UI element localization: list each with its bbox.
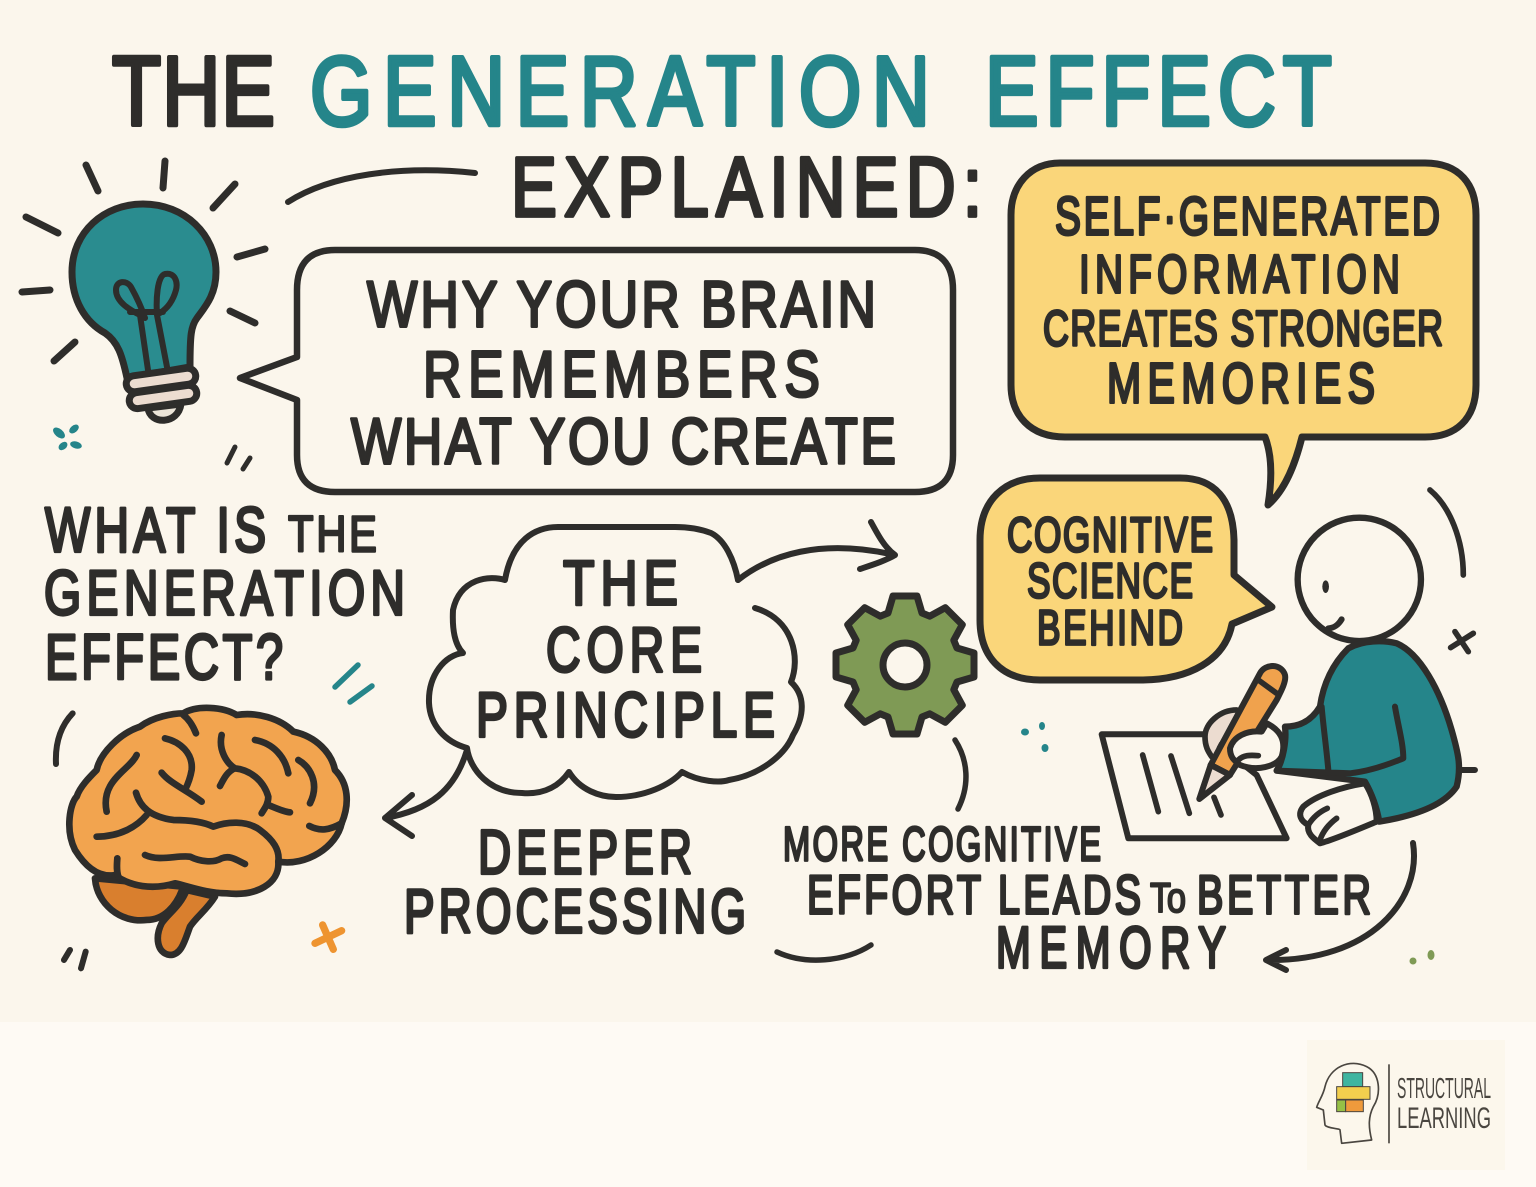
speech bubble: why your brain: WHAT YOU CREATE: [351, 404, 896, 478]
speech bubble: why your brain: REMEMBERS: [423, 337, 820, 411]
motion marks: [1430, 490, 1473, 652]
title: [112, 36, 1332, 235]
heading: what is the generation effect: WHAT IS: [45, 494, 266, 565]
title: EXPLAINED:: [511, 141, 982, 235]
speech bubble: cognitive science behind: BEHIND: [1037, 601, 1183, 656]
label: more cognitive effort leads to better memory: MORE COGNITIVE: [783, 817, 1101, 871]
thought cloud: the core principle: [429, 527, 802, 797]
speech bubble: self-generated information: INFORMATION: [1079, 243, 1400, 304]
writing hand: [1230, 723, 1283, 768]
heading: what is the generation effect: [44, 494, 405, 694]
label: more cognitive effort leads to better memory: To: [1150, 875, 1186, 922]
head: [1298, 518, 1421, 641]
label: more cognitive effort leads to better memory: BETTER: [1197, 865, 1371, 926]
curved stroke below gear: [955, 740, 966, 809]
speech bubble: why your brain: [240, 250, 953, 492]
sparkle marks near bulb: [51, 423, 250, 469]
curved stroke below text: [777, 945, 871, 960]
speech bubble: self-generated information: CREATES STRONGER: [1043, 302, 1443, 357]
sparkle dots: teal: [1021, 722, 1048, 752]
lower hand: [1300, 783, 1377, 843]
icon: gear: [836, 596, 974, 734]
logo: structural learning: [1307, 1040, 1505, 1170]
label: deeper processing: PROCESSING: [404, 877, 746, 946]
arrow: cloud to brain: [385, 750, 467, 836]
label: more cognitive effort leads to better memory: MEMORY: [996, 915, 1226, 980]
pencil: [1199, 666, 1285, 799]
label: deeper processing: DEEPER: [478, 818, 692, 887]
title: GENERATION: [310, 36, 930, 146]
thought cloud: the core principle: THE: [563, 549, 678, 619]
icon: brain: [56, 708, 347, 968]
title: EFFECT: [985, 36, 1332, 146]
label: deeper processing: [404, 818, 746, 946]
title: THE: [112, 36, 275, 146]
back of writing hand: [1205, 710, 1237, 757]
teal tick marks: [335, 665, 372, 702]
arrow: cloud to gear: [738, 522, 895, 580]
speech bubble: why your brain: WHY YOUR BRAIN: [367, 267, 876, 341]
arrow: effort to memory: [1266, 843, 1414, 970]
illustration: person writing: [1102, 490, 1475, 843]
heading: what is the generation effect: EFFECT?: [45, 623, 283, 694]
icon: light bulb: [22, 161, 265, 420]
torso: [1277, 641, 1475, 822]
label: more cognitive effort leads to better memory: EFFORT LEADS: [807, 865, 1141, 926]
decorative swoosh line beside heading: [288, 170, 475, 202]
label: more cognitive effort leads to better memory: [783, 817, 1371, 980]
speech bubble: cognitive science behind: SCIENCE: [1027, 554, 1193, 609]
speech bubble: cognitive science behind: COGNITIVE: [1007, 508, 1213, 563]
paper: [1102, 734, 1287, 838]
speech bubble: self-generated information: SELF·GENERATED: [1055, 185, 1440, 246]
heading: what is the generation effect: THE: [288, 506, 377, 562]
thought cloud: the core principle: CORE: [546, 614, 702, 685]
speech bubble: self-generated information: [1011, 163, 1476, 505]
sparkle dots: green: [1410, 950, 1434, 964]
heading: what is the generation effect: GENERATION: [44, 557, 405, 628]
speech bubble: cognitive science behind: [980, 478, 1272, 680]
thought cloud: the core principle: PRINCIPLE: [476, 679, 775, 750]
speech bubble: self-generated information: MEMORIES: [1107, 351, 1375, 415]
